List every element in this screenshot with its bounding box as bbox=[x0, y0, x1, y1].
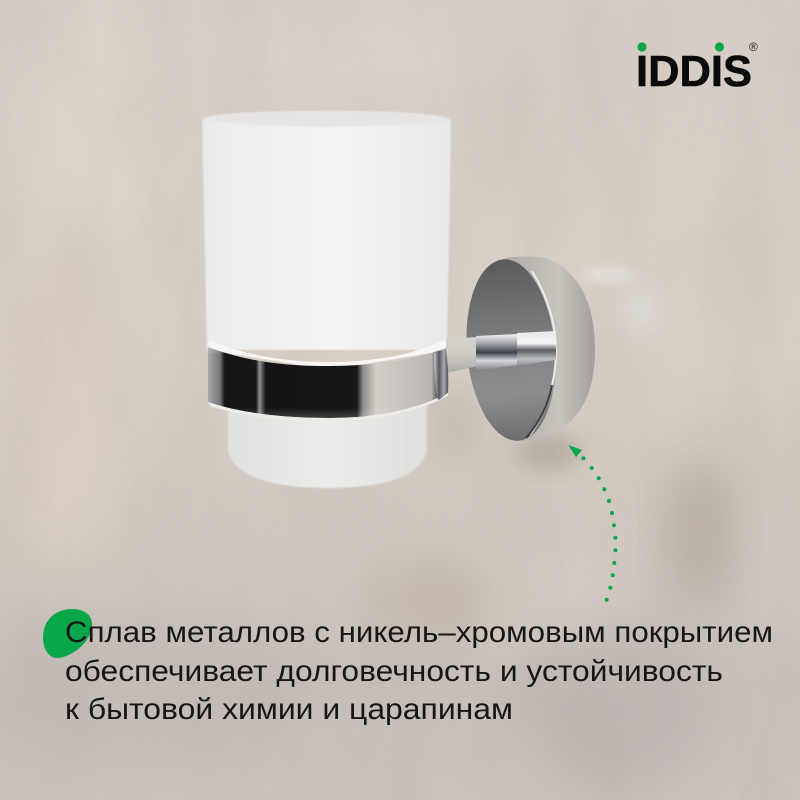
caption text: Сплав металлов с никель–хромовым покрытием bbox=[65, 616, 773, 649]
frosted glass cup bbox=[202, 111, 451, 488]
shadow: holder on wall bbox=[425, 385, 582, 470]
plate edge highlight bbox=[530, 271, 556, 435]
plate edge shadow bbox=[526, 385, 552, 438]
wall plate bbox=[459, 256, 595, 444]
caption text: обеспечивает долговечность и устойчивость bbox=[65, 655, 723, 688]
chrome band bbox=[208, 339, 448, 421]
dotted green arrow bbox=[568, 445, 617, 602]
glass lower body bbox=[228, 400, 427, 488]
arrowhead bbox=[568, 445, 582, 457]
green blob accent bbox=[43, 609, 92, 658]
plate face bbox=[459, 256, 563, 444]
caption text bbox=[65, 616, 773, 726]
logo: IDDIS bbox=[636, 40, 758, 96]
glass upper body bbox=[202, 111, 451, 350]
glass rim bbox=[202, 111, 451, 127]
logo wordmark: IDDIS bbox=[636, 47, 752, 96]
plate side bbox=[505, 256, 595, 441]
caption text: к бытовой химии и царапинам bbox=[65, 693, 513, 726]
logo green dot right bbox=[715, 42, 724, 52]
logo green dot left bbox=[637, 42, 647, 52]
band end clasp bbox=[434, 349, 448, 400]
logo registered mark: ® bbox=[749, 40, 758, 54]
connecting rod bbox=[446, 331, 556, 373]
